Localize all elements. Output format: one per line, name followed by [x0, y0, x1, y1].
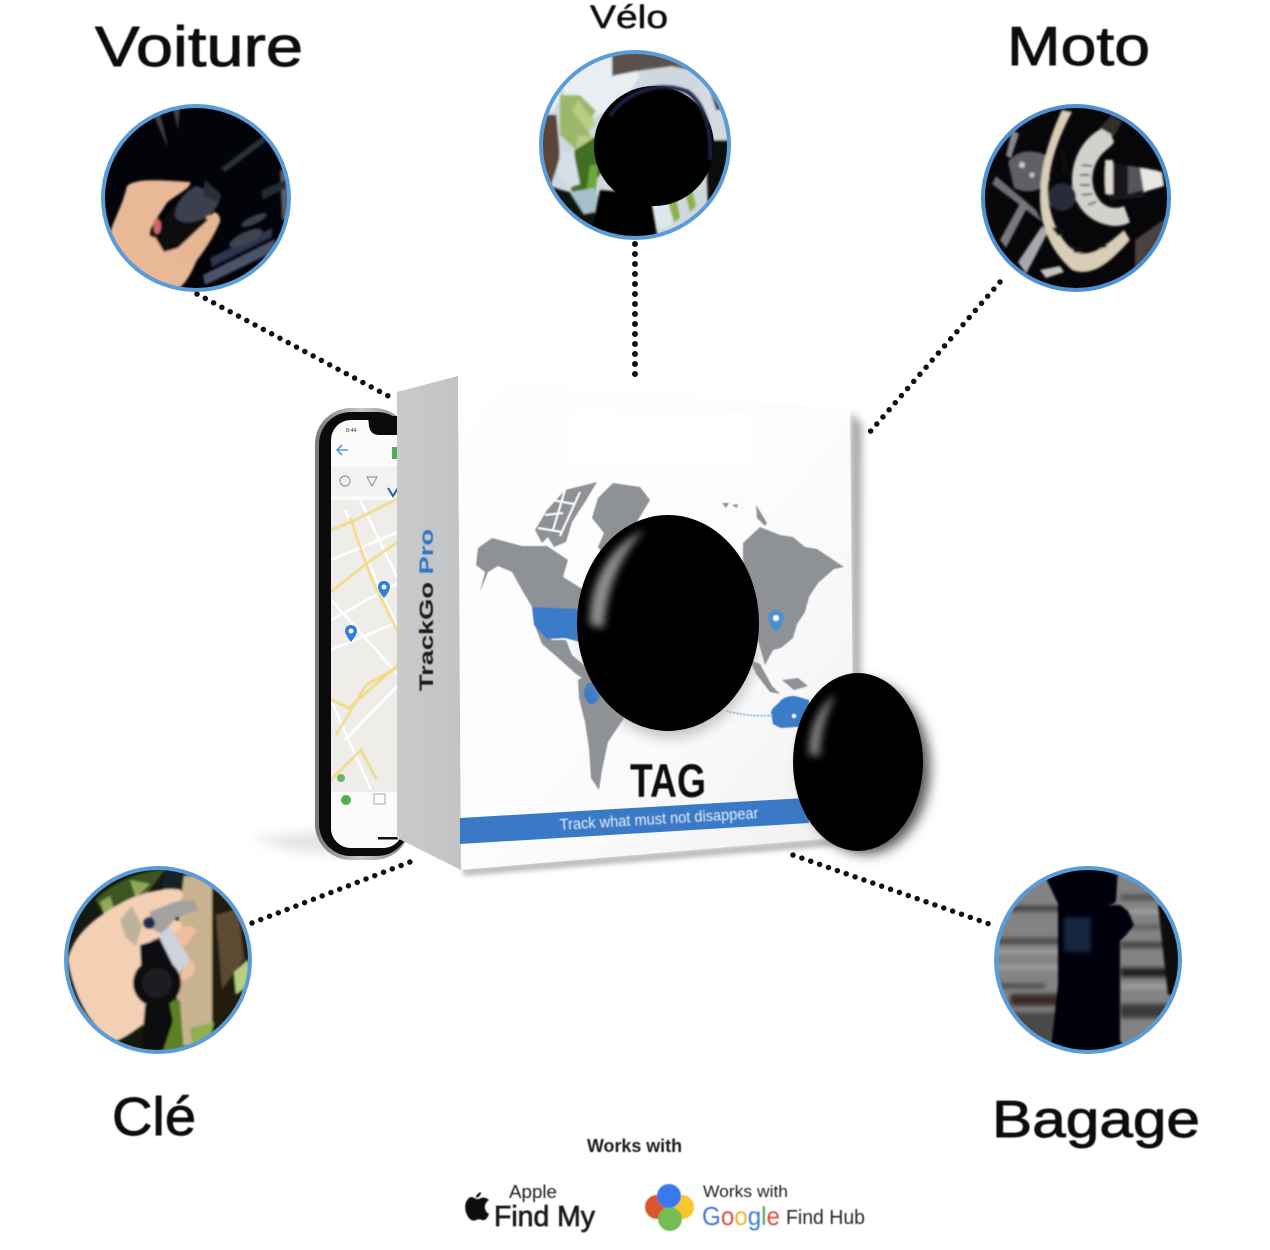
small tag	[793, 673, 930, 854]
connector: Vélo to box	[632, 244, 638, 381]
box front face	[458, 376, 854, 870]
route line	[726, 711, 774, 716]
photo circle: Moto	[980, 100, 1175, 295]
phone body	[315, 408, 410, 860]
brand on side: TrackGo Pro	[417, 529, 438, 691]
continent: north america	[476, 538, 584, 610]
title: Bagage: Bagage	[992, 1091, 1200, 1149]
product box	[397, 376, 862, 876]
photo circle: Bagage	[995, 866, 1182, 1057]
blue slogan band	[460, 798, 809, 844]
connector: Voiture to box	[197, 294, 392, 398]
world map	[476, 482, 844, 790]
map pin	[768, 610, 784, 632]
logo: Google Find Hub: Find Hub	[786, 1207, 865, 1229]
continent: islands	[722, 503, 808, 694]
title: Voiture: Voiture	[95, 15, 303, 79]
heading: works with: Works with	[587, 1136, 682, 1156]
bottom nav bar	[331, 792, 403, 850]
country: usa	[532, 607, 584, 642]
box side face	[397, 376, 461, 870]
phone	[315, 408, 410, 860]
blank label	[568, 414, 752, 464]
large tag on box	[577, 515, 759, 738]
logo: Google Find Hub: Works with	[703, 1183, 788, 1201]
compatibility section	[465, 1136, 865, 1233]
phone screen with map	[331, 420, 403, 850]
title: Moto: Moto	[1007, 15, 1150, 77]
connector: Bagage to tag	[793, 855, 995, 926]
icon: four petals	[645, 1184, 694, 1231]
continent: arctic islands	[535, 482, 597, 547]
connector: Clé to box	[252, 862, 410, 923]
phone notch	[368, 416, 404, 435]
photo circle: Clé	[65, 868, 252, 1054]
logo: Apple Find My: Find My	[494, 1201, 595, 1233]
TAG title: TAG	[630, 754, 706, 807]
country: peru pin	[584, 682, 600, 704]
logo: Apple Find My	[465, 1182, 595, 1233]
title: Clé: Clé	[112, 1087, 196, 1147]
continent: mexico and central america	[535, 626, 592, 684]
connector: Moto to box	[869, 282, 1000, 433]
title: Vélo: Vélo	[590, 0, 668, 35]
logo: Google Find Hub: Google	[702, 1201, 780, 1231]
phone: 8:44	[346, 428, 357, 434]
continent: asia	[743, 527, 844, 665]
country: australia	[771, 696, 811, 728]
map pin	[345, 625, 357, 642]
back arrow	[337, 445, 348, 455]
box bottom shadow	[462, 836, 860, 876]
continent: south america	[578, 672, 624, 790]
photo circle: Voiture	[100, 100, 295, 295]
ground shadow under product	[250, 832, 360, 856]
box right shadow	[850, 412, 862, 764]
toolbar icons	[340, 476, 350, 486]
photo circle: Vélo	[540, 46, 730, 240]
map pin	[378, 581, 390, 598]
icon: apple	[465, 1192, 489, 1221]
slogan: Track what must not disappear	[559, 805, 759, 834]
logo: Apple Find My: Apple	[509, 1182, 557, 1202]
logo: Google Find Hub	[645, 1183, 865, 1231]
continent: greenland	[592, 483, 650, 569]
